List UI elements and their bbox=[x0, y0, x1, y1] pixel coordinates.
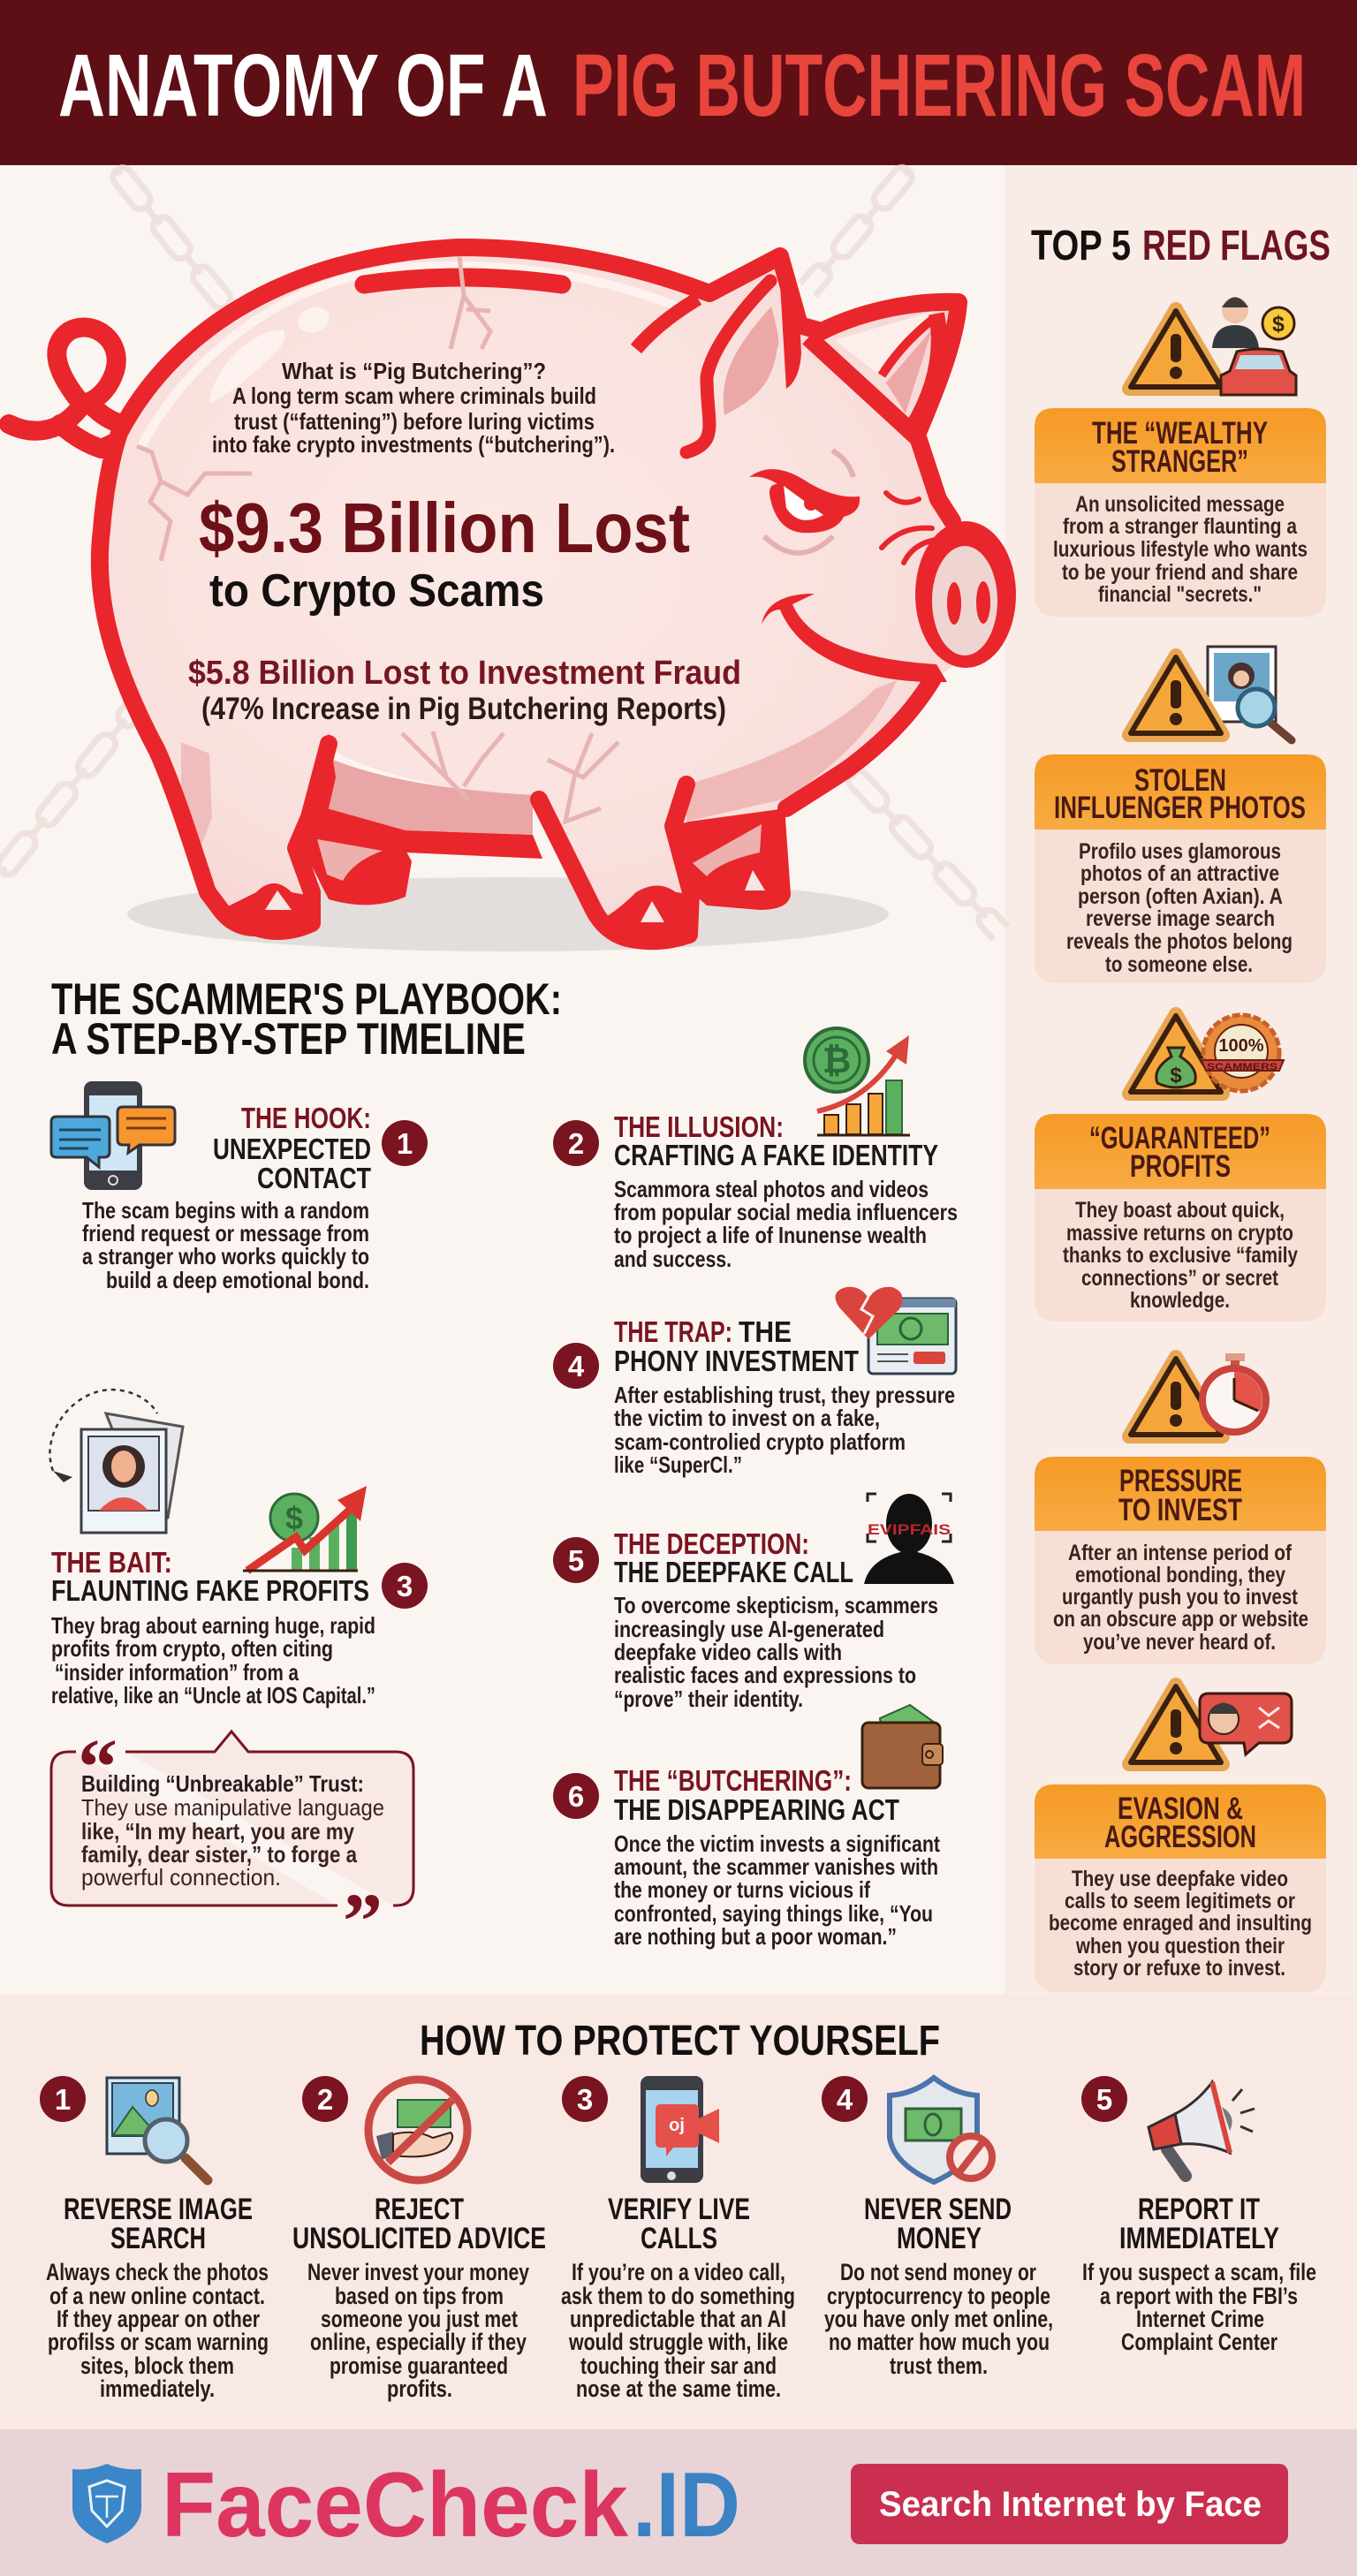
step 3: the bait: They brag about earning huge, rapid bbox=[51, 1612, 375, 1639]
step 4: the trap: THE bbox=[739, 1315, 792, 1348]
icon: shield logo bbox=[72, 2464, 141, 2543]
tip 5: report it immediately: REPORT IT bbox=[1138, 2193, 1260, 2226]
eye bbox=[749, 469, 860, 533]
card: evasion and aggression: story or refuxe to invest. bbox=[1073, 1956, 1285, 1981]
card: stolen influencer photos bbox=[1035, 754, 1326, 983]
tip 5: report it immediately: a report with the FBI’s bbox=[1100, 2283, 1298, 2309]
card: guaranteed profits: thanks to exclusive “family bbox=[1063, 1243, 1298, 1268]
step 1: the hook: The scam begins with a random bbox=[82, 1197, 369, 1224]
pig text: what is pig butchering: What is “Pig Butchering”? bbox=[282, 358, 546, 384]
shading and belly band bbox=[181, 680, 897, 859]
icon: broken heart and fake platform bbox=[836, 1287, 956, 1374]
step 3: the bait: profits from crypto, often citing bbox=[51, 1635, 333, 1662]
step 3: the bait: relative, like an “Uncle at IOS Capital.” bbox=[51, 1682, 375, 1708]
pig text: what is pig butchering: trust (“fattening”) before luring victims bbox=[234, 408, 595, 435]
step 4: the trap: like “SuperCl.” bbox=[614, 1451, 742, 1478]
icon: warning with money bag and badge bbox=[1129, 1014, 1284, 1094]
tip 3: verify live calls: would struggle with, like bbox=[568, 2329, 788, 2355]
card: evasion and aggression: EVASION & bbox=[1118, 1792, 1243, 1826]
icon: deepfake silhouette bbox=[864, 1494, 954, 1584]
step 4: the trap: PHONY INVESTMENT bbox=[614, 1345, 859, 1377]
card: stolen influencer photos: to someone else. bbox=[1105, 952, 1253, 977]
card: wealthy stranger bbox=[1035, 408, 1326, 617]
tip 2: reject unsolicited advice: based on tips from bbox=[335, 2283, 504, 2309]
icon: warning with money bag and badge: $ bbox=[1170, 1064, 1182, 1087]
step 2: the illusion: CRAFTING A FAKE IDENTITY bbox=[614, 1139, 938, 1171]
step 2: the illusion: from popular social media influencers bbox=[614, 1199, 958, 1225]
tip 5: report it immediately: 5 bbox=[1096, 2083, 1112, 2116]
tip 1: reverse image search: immediately. bbox=[100, 2375, 215, 2402]
tip 2: reject unsolicited advice: UNSOLICITED ADVICE bbox=[292, 2222, 546, 2255]
step 4: the trap bbox=[553, 1287, 956, 1478]
card: guaranteed profits: knowledge. bbox=[1130, 1288, 1230, 1313]
hooves bbox=[221, 883, 691, 943]
icon: empty wallet with cash bbox=[862, 1705, 943, 1788]
step 5: the deception: THE DEEPFAKE CALL bbox=[614, 1556, 853, 1588]
step 5: the deception: 5 bbox=[568, 1544, 584, 1577]
tip 2: reject unsolicited advice: REJECT bbox=[375, 2193, 464, 2226]
ears bbox=[636, 281, 939, 452]
step 3: the bait: 3 bbox=[397, 1570, 413, 1602]
tip 3: verify live calls: CALLS bbox=[641, 2222, 717, 2255]
callout: building unbreakable trust: They use manipulative language bbox=[81, 1794, 384, 1821]
card: guaranteed profits: connections” or secret bbox=[1081, 1266, 1279, 1291]
tip 4: never send money: Do not send money or bbox=[840, 2259, 1036, 2285]
tip 2: reject unsolicited advice bbox=[292, 2076, 546, 2402]
step 3: the bait: FLAUNTING FAKE PROFITS bbox=[51, 1574, 369, 1607]
icon: deepfake silhouette: EVIPFAIS bbox=[868, 1521, 951, 1538]
step 5: the deception: deepfake video calls with bbox=[614, 1639, 842, 1665]
stat: 5.8 billion: $5.8 Billion Lost to Investment Fraud bbox=[188, 655, 741, 692]
card: wealthy stranger: from a stranger flaunting a bbox=[1063, 514, 1298, 539]
step 6: the butchering: THE DISAPPEARING ACT bbox=[614, 1793, 899, 1826]
step 1: the hook bbox=[51, 1081, 428, 1293]
tip 2: reject unsolicited advice: someone you just met bbox=[321, 2306, 518, 2332]
step 2: the illusion bbox=[553, 1028, 958, 1272]
heading: scammer's playbook: A STEP-BY-STEP TIMELINE bbox=[51, 1014, 526, 1064]
icon: warning with money bag and badge: SCAMMERS bbox=[1207, 1062, 1277, 1072]
tip 5: report it immediately: Complaint Center bbox=[1121, 2329, 1277, 2355]
card: pressure to invest: emotional bonding, they bbox=[1075, 1563, 1285, 1587]
icon: megaphone bbox=[1149, 2082, 1255, 2176]
footer bbox=[0, 2429, 1357, 2576]
step 2: the illusion: to project a life of Inunense wealth bbox=[614, 1222, 927, 1248]
tip 5: report it immediately: IMMEDIATELY bbox=[1119, 2222, 1279, 2255]
card: wealthy stranger: luxurious lifestyle who wants bbox=[1053, 537, 1308, 562]
heading: protect: HOW TO PROTECT YOURSELF bbox=[420, 2018, 940, 2065]
step 5: the deception: To overcome skepticism, scammers bbox=[614, 1592, 938, 1618]
smile bbox=[762, 594, 947, 682]
step 1: the hook: THE HOOK: bbox=[241, 1102, 371, 1134]
icon: bitcoin with rising bars: ₿ bbox=[823, 1042, 851, 1080]
stat: 9.3 billion bbox=[199, 489, 690, 617]
illustration: piggy bank bbox=[9, 247, 1010, 943]
icon: warning with wealthy stranger bbox=[1129, 297, 1296, 395]
tip 4: never send money: MONEY bbox=[897, 2222, 982, 2255]
step 6: the butchering: THE “BUTCHERING”: bbox=[614, 1764, 852, 1797]
card: evasion and aggression: They use deepfake video bbox=[1072, 1867, 1288, 1891]
card: pressure to invest: on an obscure app or website bbox=[1053, 1607, 1308, 1632]
step 5: the deception: THE DECEPTION: bbox=[614, 1527, 809, 1560]
icon: phone video call bbox=[641, 2076, 719, 2183]
tip 3: verify live calls: unpredictable that an AI bbox=[570, 2306, 786, 2332]
stat: 5.8 billion bbox=[188, 655, 741, 726]
cracks bbox=[137, 256, 618, 822]
step 1: the hook: 1 bbox=[397, 1127, 413, 1160]
tail bbox=[9, 328, 122, 449]
step 2: the illusion: 2 bbox=[568, 1127, 584, 1160]
card: wealthy stranger: STRANGER” bbox=[1111, 444, 1248, 479]
pig outline bbox=[100, 247, 959, 941]
panel: red flags column background bbox=[1004, 165, 1357, 1995]
pig body fill bbox=[100, 247, 972, 941]
tip 3: verify live calls: If you’re on a video call, bbox=[572, 2259, 785, 2285]
icon: bitcoin with rising bars bbox=[805, 1028, 910, 1135]
icon: image with magnifier bbox=[107, 2078, 208, 2180]
header banner bbox=[0, 0, 1357, 165]
step 5: the deception: increasingly use AI-generated bbox=[614, 1616, 884, 1642]
icon: profit chart: $ bbox=[285, 1500, 303, 1536]
card: pressure to invest: TO INVEST bbox=[1118, 1493, 1242, 1527]
pig text: what is pig butchering bbox=[212, 358, 615, 458]
step 3: the bait: “insider information” from a bbox=[55, 1659, 299, 1686]
stat: 5.8 billion: (47% Increase in Pig Butchering Reports) bbox=[201, 692, 726, 726]
step 1: the hook: CONTACT bbox=[257, 1162, 371, 1194]
tip 5: report it immediately bbox=[1081, 2076, 1316, 2355]
pig text: what is pig butchering: A long term scam where criminals build bbox=[232, 383, 596, 409]
icon: warning with wealthy stranger: $ bbox=[1272, 312, 1285, 337]
step 4: the trap: THE TRAP: bbox=[614, 1315, 732, 1348]
card: stolen influencer photos: person (often Axian). A bbox=[1078, 884, 1283, 909]
step 6: the butchering: Once the victim invests a significant bbox=[614, 1830, 940, 1857]
icon: profile photo stack bbox=[49, 1390, 183, 1533]
tip 4: never send money: 4 bbox=[837, 2083, 853, 2116]
highlights bbox=[141, 266, 685, 446]
heading: scammer's playbook: THE SCAMMER'S PLAYBOOK: bbox=[51, 974, 562, 1024]
card: guaranteed profits: massive returns on crypto bbox=[1066, 1221, 1293, 1246]
tip 1: reverse image search: 1 bbox=[55, 2083, 71, 2116]
callout: building unbreakable trust: powerful connection. bbox=[81, 1864, 281, 1890]
step 1: the hook: friend request or message from bbox=[82, 1220, 369, 1246]
card: pressure to invest: After an intense period of bbox=[1068, 1541, 1293, 1565]
card: stolen influencer photos: reveals the photos belong bbox=[1066, 929, 1293, 954]
icon: warning with money bag and badge: 100% bbox=[1218, 1036, 1264, 1056]
far legs bbox=[305, 795, 791, 910]
step 3: the bait: THE BAIT: bbox=[51, 1546, 172, 1579]
face wrinkles bbox=[764, 451, 853, 553]
tip 5: report it immediately: Internet Crime bbox=[1136, 2306, 1264, 2332]
step 2: the illusion: THE ILLUSION: bbox=[614, 1110, 784, 1143]
logo wordmark: FaceCheck bbox=[162, 2454, 628, 2557]
tip 4: never send money: trust them. bbox=[890, 2352, 988, 2379]
tip 3: verify live calls: touching their sar and bbox=[580, 2352, 777, 2379]
step 5: the deception bbox=[553, 1494, 954, 1712]
step 5: the deception: realistic faces and expressions to bbox=[614, 1662, 916, 1688]
step 4: the trap: the victim to invest on a fake, bbox=[614, 1405, 880, 1431]
card: evasion and aggression bbox=[1035, 1784, 1326, 1992]
tip 3: verify live calls: VERIFY LIVE bbox=[608, 2193, 750, 2226]
tip 1: reverse image search: of a new online contact. bbox=[49, 2283, 265, 2309]
tip 3: verify live calls: ask them to do something bbox=[561, 2283, 795, 2309]
heading: scammer's playbook bbox=[51, 974, 562, 1064]
title: ANATOMY OF A bbox=[58, 36, 548, 135]
card: guaranteed profits: “GUARANTEED” bbox=[1089, 1121, 1270, 1155]
card: pressure to invest bbox=[1035, 1457, 1326, 1664]
icon: no money hand bbox=[368, 2080, 467, 2180]
card: guaranteed profits: They boast about quick, bbox=[1075, 1198, 1285, 1223]
tip 3: verify live calls: 3 bbox=[577, 2083, 593, 2116]
tip 4: never send money: no matter how much you bbox=[829, 2329, 1050, 2355]
card: pressure to invest: you’ve never heard of. bbox=[1083, 1630, 1276, 1655]
step 2: the illusion: Scammora steal photos and videos bbox=[614, 1176, 929, 1202]
tip 1: reverse image search: Always check the photos bbox=[46, 2259, 269, 2285]
card: guaranteed profits bbox=[1035, 1114, 1326, 1322]
card: wealthy stranger: THE “WEALTHY bbox=[1092, 416, 1268, 451]
step 6: the butchering: the money or turns vicious if bbox=[614, 1876, 870, 1903]
tip 4: never send money: you have only met online, bbox=[824, 2306, 1053, 2332]
step 3: the bait bbox=[49, 1390, 428, 1708]
card: wealthy stranger: to be your friend and share bbox=[1062, 560, 1298, 585]
card: evasion and aggression: AGGRESSION bbox=[1104, 1820, 1256, 1854]
tip 1: reverse image search: profilss or scam warning bbox=[48, 2329, 269, 2355]
callout: building unbreakable trust: family, dear sister,” to forge a bbox=[81, 1841, 357, 1868]
stat: 9.3 billion: to Crypto Scams bbox=[209, 565, 544, 617]
money slot bbox=[364, 277, 562, 284]
stat: 9.3 billion: $9.3 Billion Lost bbox=[199, 489, 690, 567]
tip 1: reverse image search: If they appear on other bbox=[57, 2306, 260, 2332]
callout: building unbreakable trust: like, “In my heart, you are my bbox=[81, 1818, 354, 1845]
tip 2: reject unsolicited advice: profits. bbox=[387, 2375, 452, 2402]
icon: profit chart bbox=[243, 1486, 367, 1571]
icon: shield with cash bbox=[890, 2078, 992, 2182]
button: search internet by face: Search Internet by Face bbox=[879, 2485, 1262, 2524]
tip 4: never send money bbox=[822, 2076, 1053, 2379]
whiskers bbox=[882, 493, 944, 563]
title bbox=[58, 36, 1306, 135]
step 1: the hook: build a deep emotional bond. bbox=[106, 1267, 369, 1293]
callout: building unbreakable trust bbox=[51, 1724, 413, 1966]
step 4: the trap: 4 bbox=[568, 1350, 585, 1383]
card: pressure to invest: PRESSURE bbox=[1119, 1464, 1242, 1498]
decorative chains bbox=[0, 159, 1010, 942]
step 1: the hook: UNEXPECTED bbox=[213, 1133, 371, 1165]
tip 4: never send money: cryptocurrency to people bbox=[827, 2283, 1050, 2309]
button: search internet by face bbox=[851, 2464, 1288, 2544]
card: stolen influencer photos: STOLEN bbox=[1134, 763, 1226, 798]
heading: top 5 red flags: TOP 5 bbox=[1031, 223, 1131, 269]
icon: warning with stolen photo bbox=[1129, 647, 1292, 740]
card: guaranteed profits: PROFITS bbox=[1130, 1149, 1231, 1184]
tip 3: verify live calls: nose at the same time. bbox=[576, 2375, 781, 2402]
pig text: what is pig butchering: into fake crypto investments (“butchering”). bbox=[212, 431, 615, 458]
icon: closing quote: ” bbox=[343, 1878, 383, 1966]
icon: warning with stopwatch bbox=[1129, 1353, 1266, 1436]
tip 1: reverse image search: SEARCH bbox=[110, 2222, 206, 2255]
tip 3: verify live calls bbox=[561, 2076, 795, 2402]
step 6: the butchering: are nothing but a poor woman.” bbox=[614, 1923, 897, 1950]
tip 2: reject unsolicited advice: online, especially if they bbox=[310, 2329, 527, 2355]
step 6: the butchering: confronted, saying things like, “You bbox=[614, 1900, 933, 1927]
icon: opening quote: “ bbox=[78, 1724, 118, 1811]
card: evasion and aggression: when you question their bbox=[1075, 1934, 1285, 1959]
step 6: the butchering bbox=[553, 1705, 943, 1950]
tip 1: reverse image search bbox=[40, 2076, 269, 2402]
step 1: the hook: a stranger who works quickly to bbox=[82, 1243, 369, 1269]
tip 1: reverse image search: sites, block them bbox=[80, 2352, 234, 2379]
tip 2: reject unsolicited advice: 2 bbox=[317, 2083, 333, 2116]
icon: phone video call: oj bbox=[669, 2116, 685, 2135]
panel: how to protect yourself bbox=[0, 1995, 1357, 2429]
tip 1: reverse image search: REVERSE IMAGE bbox=[64, 2193, 253, 2226]
step 4: the trap: scam-controlied crypto platform bbox=[614, 1428, 906, 1455]
card: stolen influencer photos: photos of an attractive bbox=[1080, 861, 1279, 886]
step 6: the butchering: amount, the scammer vanishes with bbox=[614, 1853, 938, 1880]
card: wealthy stranger: An unsolicited message bbox=[1075, 492, 1285, 517]
card: evasion and aggression: calls to seem legitimets or bbox=[1065, 1889, 1295, 1913]
step 2: the illusion: and success. bbox=[614, 1246, 732, 1272]
icon: warning with angry speech bubble bbox=[1129, 1685, 1292, 1764]
pig shadow bbox=[127, 877, 889, 951]
callout: building unbreakable trust: Building “Unbreakable” Trust: bbox=[81, 1770, 364, 1797]
card: pressure to invest: urgantly push you to invest bbox=[1062, 1585, 1299, 1610]
icon: phone with chat bubbles bbox=[51, 1081, 175, 1190]
card: wealthy stranger: financial "secrets." bbox=[1098, 582, 1262, 607]
step 5: the deception: “prove” their identity. bbox=[614, 1686, 803, 1712]
snout bbox=[921, 527, 1010, 662]
step 4: the trap: After establishing trust, they pressure bbox=[614, 1382, 955, 1408]
logo wordmark: .ID bbox=[633, 2454, 740, 2557]
heading: top 5 red flags bbox=[1031, 223, 1330, 269]
step 6: the butchering: 6 bbox=[568, 1780, 584, 1813]
card: stolen influencer photos: reverse image search bbox=[1086, 906, 1275, 931]
card: stolen influencer photos: Profilo uses glamorous bbox=[1079, 839, 1281, 864]
tip 4: never send money: NEVER SEND bbox=[864, 2193, 1012, 2226]
tip 2: reject unsolicited advice: Never invest your money bbox=[307, 2259, 529, 2285]
tip 2: reject unsolicited advice: promise guaranteed bbox=[330, 2352, 508, 2379]
